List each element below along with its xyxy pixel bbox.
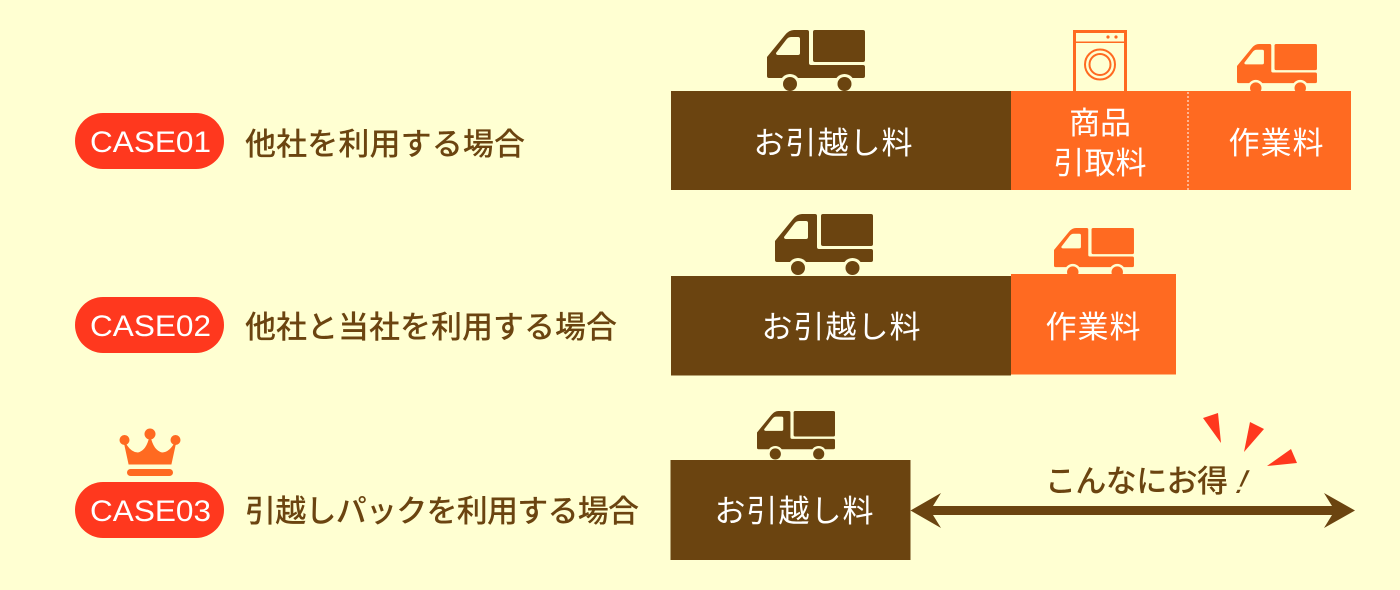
heading: case 02: 他社と当社を利用する場合: [245, 310, 617, 345]
row: case 01: [75, 30, 1351, 190]
icon: brown truck: [767, 30, 865, 94]
badge: CASE03: [75, 482, 224, 538]
icon: brown truck: [757, 411, 835, 462]
row: case 02: [75, 214, 1176, 376]
bar: work fee: [1011, 274, 1176, 374]
bar: moving fee: お引越し料: [714, 494, 874, 529]
icon: washing machine: [1074, 32, 1126, 94]
bar: moving fee: お引越し料: [762, 310, 920, 345]
icon: brown truck: [775, 214, 873, 278]
bar: moving fee: [670, 460, 910, 560]
bar: pickup fee and work fee: 引取料: [1054, 146, 1146, 181]
badge: CASE02: [75, 297, 224, 353]
bar: pickup fee and work fee: [1011, 91, 1351, 190]
row: case 03: [75, 411, 1355, 560]
callout: savings text: こんなにお得: [1045, 464, 1228, 499]
heading: case 01: 他社を利用する場合: [245, 127, 525, 162]
badge: CASE01: CASE01: [90, 126, 211, 159]
icon: crown: [120, 428, 180, 476]
bar: moving fee: お引越し料: [754, 126, 912, 161]
bar: moving fee: [671, 91, 1011, 190]
badge: CASE02: CASE02: [90, 310, 211, 343]
bar: moving fee: [671, 276, 1011, 376]
icon: orange truck: [1054, 228, 1134, 280]
icon: emphasis marks: [1203, 413, 1297, 466]
badge: CASE01: [75, 113, 224, 169]
bar: pickup fee and work fee: 商品: [1069, 106, 1131, 141]
heading: case 03: 引越しパックを利用する場合: [245, 494, 639, 529]
icon: orange truck: [1237, 44, 1317, 96]
bar: work fee: 作業料: [1046, 310, 1140, 345]
arrow: savings span: [910, 493, 1355, 528]
badge: CASE03: CASE03: [90, 495, 211, 528]
callout: savings text: !: [1229, 465, 1255, 501]
bar: pickup fee and work fee: 作業料: [1228, 126, 1324, 161]
